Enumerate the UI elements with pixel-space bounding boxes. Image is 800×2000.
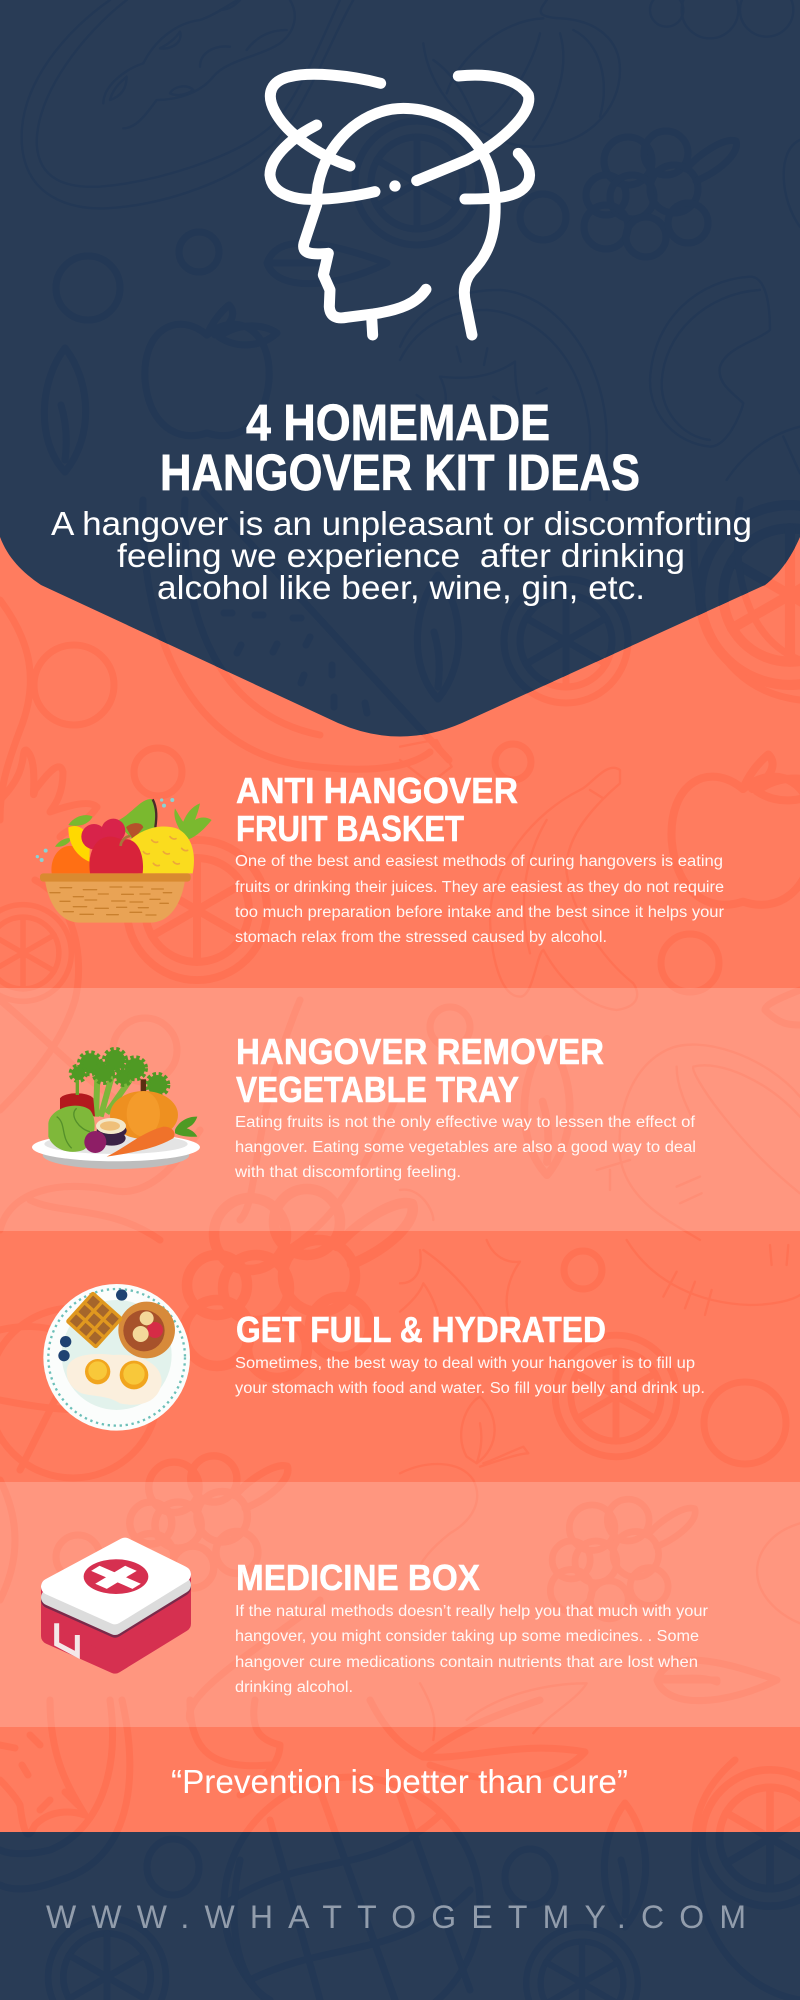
- text: get full: Sometimes, the best way to deal with your hangover is to fill up: [235, 1355, 695, 1372]
- icon: fruit basket: [36, 798, 212, 923]
- pineapple leaves: [174, 803, 212, 839]
- lid side: [49, 1557, 183, 1627]
- heading: fruit basket: FRUIT BASKET: [236, 808, 464, 849]
- panel: vegetable tray band: [0, 988, 800, 1231]
- pumpkin: [135, 1079, 151, 1093]
- orange: [51, 846, 92, 873]
- title: [160, 394, 640, 501]
- intro text: [51, 505, 752, 606]
- quote: “Prevention is better than cure”: [171, 1763, 628, 1800]
- yellow fruit: [68, 826, 90, 862]
- heading: fruit basket: ANTI HANGOVER: [236, 770, 518, 811]
- beet: [84, 1131, 106, 1153]
- pineapple: [125, 826, 194, 873]
- lid top: [49, 1546, 183, 1616]
- panel: medicine box band: [0, 1482, 800, 1727]
- text: fruit basket: fruits or drinking their juices. They are easiest as they do not require: [235, 879, 724, 896]
- apple: [89, 837, 143, 873]
- text: medicine box: hangover, you might consider taking up some medicines. . Some: [235, 1628, 699, 1645]
- heading: vegetable tray: [236, 1031, 604, 1110]
- icon: vegetable tray: [32, 1050, 200, 1169]
- text: vegetable tray: Eating fruits is not the only effective way to lessen the effect of: [235, 1114, 696, 1131]
- raspberries: [81, 824, 107, 849]
- title: HANGOVER KIT IDEAS: [160, 444, 640, 501]
- text: medicine box: hangover cure medications contain nutrients that are lost when: [235, 1654, 698, 1671]
- text: fruit basket: One of the best and easiest methods of curing hangovers is eating: [235, 853, 723, 870]
- footer website url: WWW.WHATTOGETMY.COM: [46, 1899, 746, 1935]
- celery greens: [72, 1050, 167, 1095]
- red cross badge: [84, 1559, 148, 1594]
- heading: vegetable tray: VEGETABLE TRAY: [236, 1069, 519, 1110]
- blueberries: [58, 1289, 127, 1361]
- heading: medicine box: MEDICINE BOX: [236, 1557, 481, 1598]
- text: medicine box: [235, 1603, 708, 1696]
- plate: [43, 1141, 189, 1169]
- avocado: [115, 799, 156, 840]
- eggs: [67, 1354, 162, 1405]
- cabbage: [48, 1106, 95, 1152]
- handle: [57, 1623, 77, 1655]
- text: vegetable tray: [234, 1114, 696, 1181]
- intro text: A hangover is an unpleasant or discomforting: [51, 505, 752, 542]
- icon: dizzy head: [270, 74, 530, 335]
- text: fruit basket: too much preparation before intake and the best since it helps your: [235, 904, 724, 921]
- text: vegetable tray: hangover. Eating some vegetables are also a good way to deal: [235, 1139, 696, 1156]
- eggplant slices: [98, 1131, 126, 1146]
- carrot: [107, 1127, 175, 1157]
- intro text: feeling we experience after drinking: [117, 537, 685, 574]
- text: vegetable tray: with that discomforting feeling.: [234, 1164, 461, 1181]
- leaves: [55, 815, 93, 847]
- text: get full: your stomach with food and water. So fill your belly and drink up.: [235, 1380, 705, 1397]
- text: medicine box: drinking alcohol.: [235, 1679, 353, 1696]
- celery stalks: [96, 1077, 130, 1117]
- text: fruit basket: [235, 853, 724, 946]
- icon: medicine box: [49, 1546, 183, 1665]
- title: 4 HOMEMADE: [246, 394, 550, 451]
- intro text: alcohol like beer, wine, gin, etc.: [157, 569, 645, 606]
- icon: breakfast plate: [43, 1284, 190, 1431]
- red body: [49, 1574, 183, 1665]
- heading: fruit basket: [236, 770, 518, 849]
- text: medicine box: If the natural methods doesn’t really help you that much with your: [235, 1603, 708, 1620]
- red pepper: [60, 1093, 95, 1117]
- basket: [45, 880, 185, 923]
- text: get full: [235, 1355, 705, 1397]
- heading: vegetable tray: HANGOVER REMOVER: [236, 1031, 604, 1072]
- text: fruit basket: stomach relax from the stressed caused by alcohol.: [235, 929, 607, 946]
- waffle: [65, 1291, 124, 1349]
- pancake: [118, 1302, 175, 1358]
- heading: get full: GET FULL & HYDRATED: [236, 1309, 606, 1350]
- lid shadow: [49, 1559, 183, 1629]
